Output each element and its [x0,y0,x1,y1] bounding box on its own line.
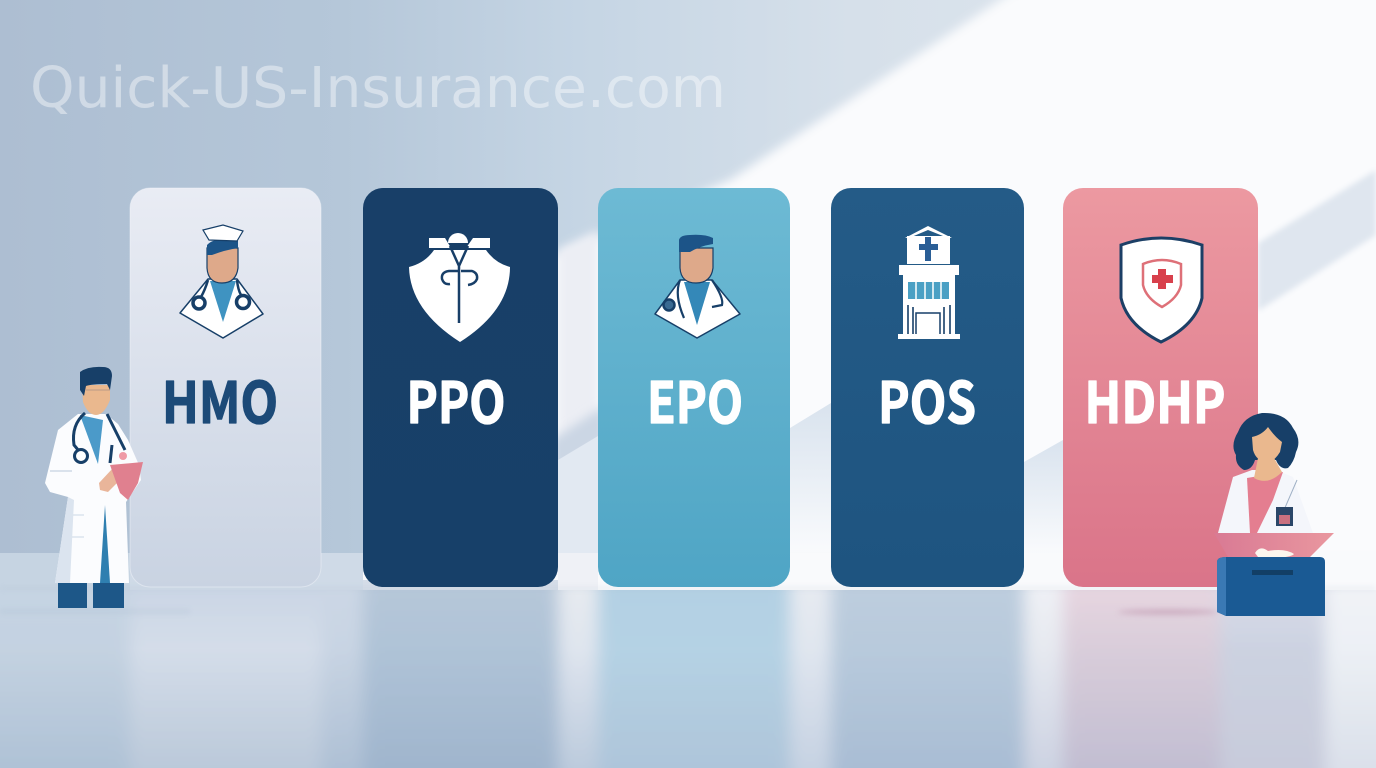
label: POS: POS [878,358,976,440]
floor [0,553,1376,768]
icon: doctor with stethoscope [655,235,740,338]
figure: woman at ballot box [1214,413,1334,616]
label: PPO: PPO [406,358,506,440]
panel: POS [831,188,1024,587]
light beams [540,0,1376,560]
icon: nurse with stethoscope [180,225,263,338]
label: HDHP: HDHP [1084,358,1226,440]
panel: HMO [130,188,321,587]
icon: hospital building [898,226,960,339]
panel: EPO [598,188,790,587]
figure: male doctor with clipboard [45,367,143,608]
watermark title: Quick-US-Insurance.com [30,56,726,121]
label: EPO: EPO [647,358,743,440]
label: HMO: HMO [162,358,278,440]
icon: shield with caduceus [409,233,510,342]
panel: PPO [363,188,558,587]
background wall [0,0,1376,556]
icon: shield with red cross [1121,238,1202,342]
panel: HDHP [1063,188,1258,587]
